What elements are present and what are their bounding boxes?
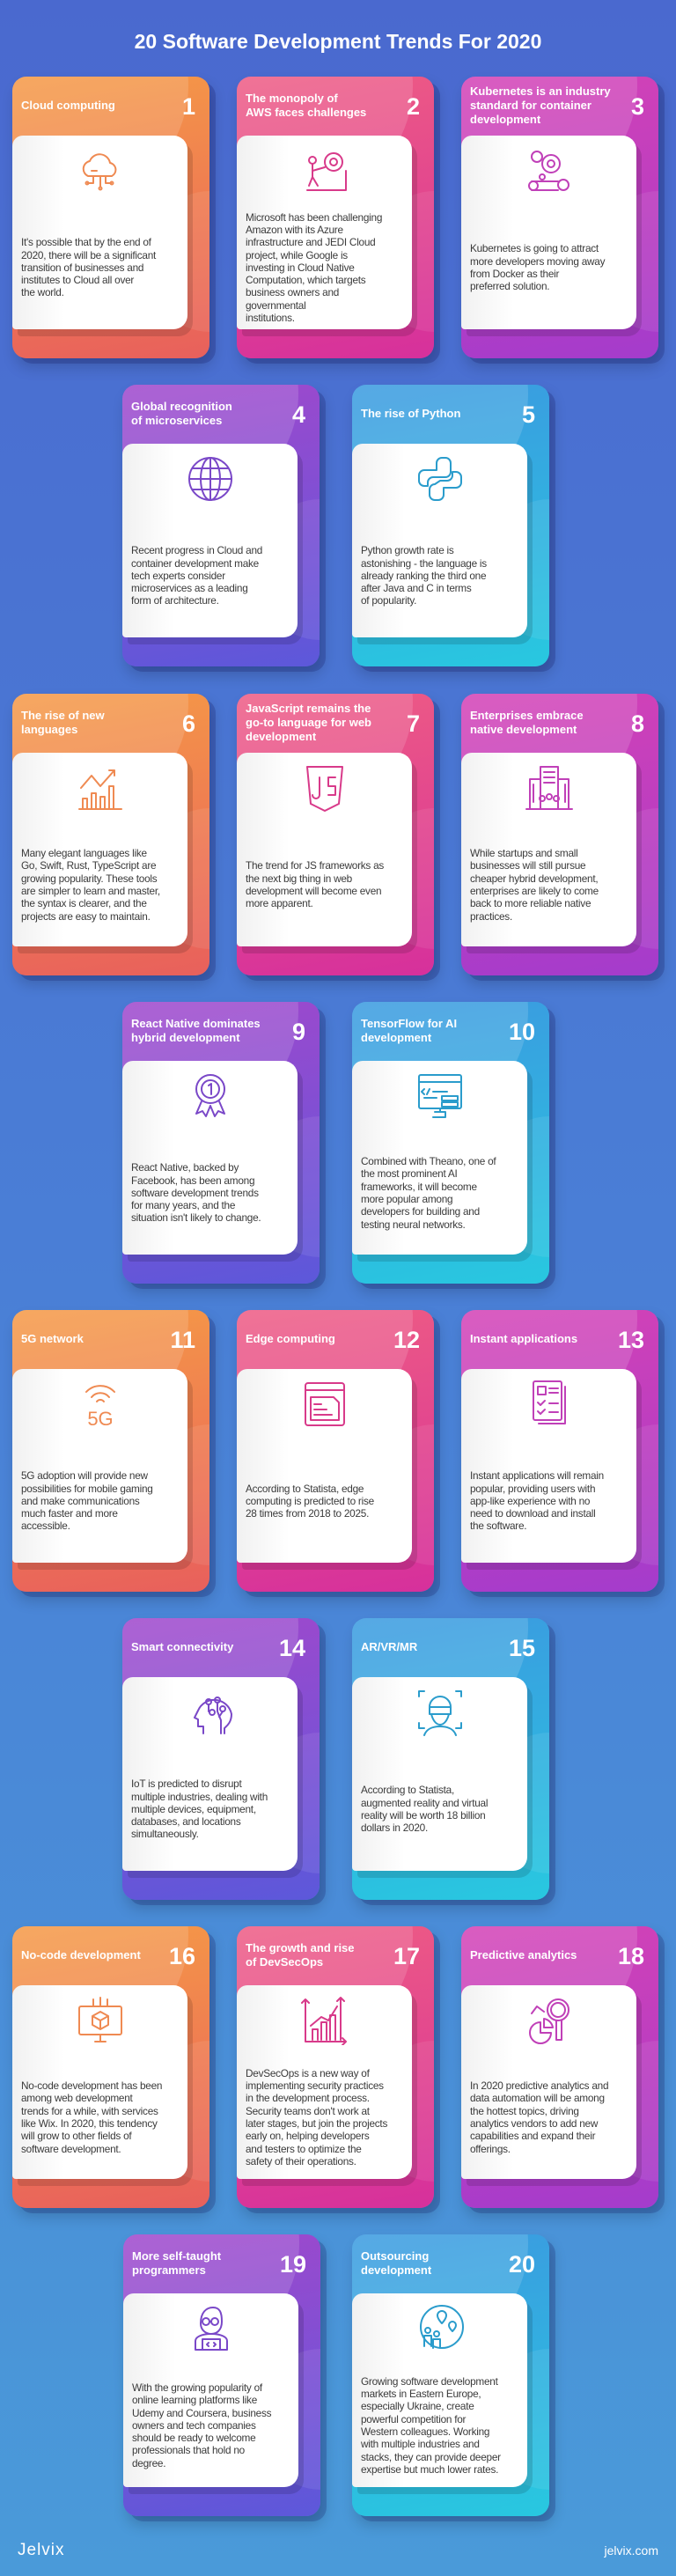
card 18 text: data automation will be among: [470, 2092, 605, 2104]
card 14 white panel: [122, 1677, 298, 1871]
icon: JS shield: [306, 766, 343, 812]
card 1 text: institutes to Cloud all over: [21, 274, 134, 286]
card 11 text: [21, 1469, 153, 1532]
card 11 heading: 5G network: [21, 1332, 84, 1345]
card 3 heading: development: [470, 113, 540, 126]
card 13 text: the software.: [470, 1520, 526, 1532]
card 10 text: Combined with Theano, one of: [361, 1155, 496, 1167]
card 19 text: [132, 2364, 299, 2487]
card 20 text: Western colleagues. Working: [361, 2425, 489, 2438]
card 8 white panel: [461, 753, 636, 946]
card 6 text: the syntax is clearer, and the: [21, 897, 147, 909]
card 8 text: While startups and small: [470, 847, 578, 859]
card 17 heading: of DevSecOps: [246, 1955, 323, 1969]
card 8 text: enterprises are likely to come: [470, 885, 599, 897]
card 12 text: According to Statista, edge: [246, 1483, 364, 1495]
icon: award badge: [195, 1074, 225, 1117]
card 13 text: app-like experience with no: [470, 1495, 590, 1507]
card 7 number: 7: [407, 710, 420, 737]
title: 20 Software Development Trends For 2020: [135, 30, 541, 53]
card 18 white panel: [461, 1985, 636, 2179]
card 4 number: 4: [292, 401, 305, 428]
card 3 text: from Docker as their: [470, 268, 559, 280]
icon: cloud: [83, 153, 116, 190]
card 7 text: The trend for JS frameworks as: [246, 859, 384, 872]
card 3 number: 3: [631, 93, 644, 120]
card 8 heading: [470, 709, 584, 736]
card 1 text: [21, 236, 157, 298]
card 13: instant apps: [461, 1310, 658, 1592]
card 8 number: 8: [631, 710, 644, 737]
icon: VR headset person: [418, 1690, 462, 1736]
card 7 text: more apparent.: [246, 897, 313, 909]
card 1: cloud computing: [12, 77, 209, 358]
footer logo: Jelvix: [18, 2541, 65, 2559]
icon: python logo: [418, 457, 462, 501]
card 11: 5G: [12, 1310, 209, 1592]
card 14 text: multiple devices, equipment,: [131, 1803, 256, 1815]
card 2 text: business owners and: [246, 286, 339, 298]
card 10 text: frameworks, it will become: [361, 1181, 477, 1193]
card 20 text: with multiple industries and: [361, 2438, 480, 2450]
card 3 white panel: [461, 136, 636, 329]
card 12 white panel: [237, 1369, 412, 1563]
card 16: no-code: [12, 1926, 209, 2208]
card 19 text: Udemy and Coursera, business: [132, 2407, 271, 2419]
card 2: AWS: [237, 77, 434, 358]
card 7 white panel: [237, 753, 412, 946]
card 6 number: 6: [182, 710, 195, 737]
card 20 heading: development: [361, 2263, 431, 2277]
card 14 text: databases, and locations: [131, 1815, 241, 1828]
card 7 heading: development: [246, 730, 316, 743]
card 6 heading: The rise of new: [21, 709, 105, 722]
card 1 white panel: [12, 136, 187, 329]
card 11 text: much faster and more: [21, 1507, 118, 1520]
card 2 number: 2: [407, 93, 420, 120]
card 7 heading: JavaScript remains the: [246, 702, 371, 715]
card 9 heading: [131, 1017, 261, 1044]
card 9 text: [131, 1161, 261, 1224]
card 10 white panel: [352, 1061, 527, 1255]
icon: magnifier pie chart: [525, 1996, 574, 2045]
card 19 text: owners and tech companies: [132, 2419, 256, 2432]
card 3 text: [470, 242, 606, 292]
card 9 text: software development trends: [131, 1187, 259, 1199]
card 4 text: form of architecture.: [131, 594, 219, 607]
card 5 text: already ranking the third one: [361, 570, 486, 582]
card 19: self-taught programmers: [123, 2234, 320, 2516]
card 3 text: Kubernetes is going to attract: [470, 242, 599, 254]
icon: bar chart arrows: [300, 1996, 349, 2045]
card 5 text: [361, 544, 487, 607]
card 2 text: investing in Cloud Native: [246, 261, 355, 274]
card 5 text: Python growth rate is: [361, 544, 454, 556]
card 19 heading: [132, 2243, 273, 2284]
card 15 text: [361, 1784, 488, 1834]
card 13 text: Instant applications will remain: [470, 1469, 604, 1482]
card 17 number: 17: [393, 1943, 420, 1969]
card 1 text: the world.: [21, 286, 64, 298]
card 17 text: early on, helping developers: [246, 2130, 370, 2142]
card 19 text: degree.: [132, 2457, 165, 2469]
card 11 text: possibilities for mobile gaming: [21, 1483, 153, 1495]
card 14 text: IoT is predicted to disrupt: [131, 1777, 241, 1790]
card 12 number: 12: [393, 1327, 420, 1353]
card 8 text: [470, 847, 599, 923]
card 11 text: and make communications: [21, 1495, 140, 1507]
card 16 text: software development.: [21, 2143, 121, 2155]
card 12: edge computing: [237, 1310, 434, 1592]
card 15 text: According to Statista,: [361, 1784, 454, 1796]
card 20 text: expertise but much lower rates.: [361, 2463, 498, 2476]
card 18: predictive analytics: [461, 1926, 658, 2208]
card 20 heading: Outsourcing: [361, 2249, 429, 2263]
card 7 text: [246, 859, 384, 909]
card 9 text: for many years, and the: [131, 1199, 235, 1211]
card 7 heading: go-to language for web: [246, 716, 371, 729]
card 13 text: need to download and install: [470, 1507, 596, 1520]
card 20 white panel: [352, 2293, 527, 2487]
icon: person pushing gear: [306, 152, 347, 191]
card 2 heading: [246, 92, 366, 119]
card 10 text: testing neural networks.: [361, 1218, 466, 1231]
card 3 text: more developers moving away: [470, 255, 605, 268]
card 19 white panel: [123, 2293, 298, 2487]
card 10: TensorFlow: [352, 1002, 549, 1284]
card 6 text: are simpler to learn and master,: [21, 885, 160, 897]
card 5 number: 5: [522, 401, 535, 428]
card 6 heading: languages: [21, 723, 77, 736]
card 8 heading: native development: [470, 723, 577, 736]
card 18 text: analytics vendors to add new: [470, 2117, 598, 2130]
card 12 heading: Edge computing: [246, 1332, 335, 1345]
card 13 number: 13: [618, 1327, 644, 1353]
card 18 text: offerings.: [470, 2143, 511, 2155]
card 3 heading: [470, 85, 611, 126]
card 6 text: growing popularity. These tools: [21, 872, 157, 885]
card 15 text: augmented reality and virtual: [361, 1797, 488, 1809]
card 17: DevSecOps: [237, 1926, 434, 2208]
card 16 text: trends for a while, with services: [21, 2105, 158, 2117]
card 10 heading: [361, 1017, 457, 1044]
card 10 text: the most prominent AI: [361, 1167, 458, 1180]
card 16 heading: No-code development: [21, 1948, 141, 1961]
card 1 text: 2020, there will be a significant: [21, 249, 156, 261]
card 5 white panel: [352, 444, 527, 637]
card 2 text: Amazon with its Azure: [246, 224, 343, 236]
card 19 text: professionals that hold no: [132, 2444, 245, 2456]
card 6: new languages: [12, 694, 209, 975]
card 15 number: 15: [509, 1635, 535, 1661]
card 7 text: the next big thing in web: [246, 872, 352, 885]
card 9 white panel: [122, 1061, 298, 1255]
card 19 text: With the growing popularity of: [132, 2381, 262, 2394]
card 14 text: [131, 1777, 268, 1840]
card 8: enterprises: [461, 694, 658, 975]
card 6 text: Go, Swift, Rust, TypeScript are: [21, 859, 156, 872]
card 6 text: Many elegant languages like: [21, 847, 147, 859]
card 4 heading: Global recognition: [131, 400, 232, 413]
card 4 text: microservices as a leading: [131, 582, 248, 594]
card 2 text: governmental: [246, 299, 305, 312]
card 4 heading: of microservices: [131, 414, 222, 427]
card 18 number: 18: [618, 1943, 644, 1969]
card 12 text: 28 times from 2018 to 2025.: [246, 1507, 369, 1520]
card 11 number: 11: [170, 1327, 195, 1353]
card 9 text: situation isn't likely to change.: [131, 1211, 261, 1224]
card 8 heading: Enterprises embrace: [470, 709, 584, 722]
card 9 heading: React Native dominates: [131, 1017, 261, 1030]
card 12 text: computing is predicted to rise: [246, 1495, 374, 1507]
card 6 heading: [21, 709, 105, 736]
card 2 text: institutions.: [246, 312, 295, 324]
card 17 text: safety of their operations.: [246, 2155, 356, 2168]
card 2 text: [246, 211, 382, 324]
card 20: outsourcing: [352, 2234, 549, 2516]
card 17 text: implementing security practices: [246, 2079, 384, 2092]
card 17 text: [246, 2056, 413, 2179]
card 11 white panel: [12, 1369, 187, 1563]
card 5 heading: The rise of Python: [361, 407, 460, 420]
card 20 text: especially Ukraine, create: [361, 2400, 474, 2412]
card 15: AR/VR/MR: [352, 1618, 549, 1900]
card 4 text: Recent progress in Cloud and: [131, 544, 262, 556]
card 17 text: Security teams don't work at: [246, 2105, 370, 2117]
card 16 text: among web development: [21, 2092, 133, 2104]
card 18 heading: Predictive analytics: [470, 1948, 577, 1961]
icon: head with circuit: [194, 1696, 232, 1734]
card 14 number: 14: [279, 1635, 305, 1661]
card 20 heading: [361, 2243, 502, 2284]
card 16 number: 16: [169, 1943, 195, 1969]
card 3 heading: Kubernetes is an industry: [470, 85, 611, 98]
card 17 text: later stages, but join the projects: [246, 2117, 387, 2130]
card 18 text: [470, 2056, 637, 2179]
card 16 white panel: [12, 1985, 187, 2179]
card 10 heading: TensorFlow for AI: [361, 1017, 457, 1030]
card 7: JavaScript: [237, 694, 434, 975]
card 1 number: 1: [182, 93, 195, 120]
card 20 text: markets in Eastern Europe,: [361, 2388, 481, 2400]
card 7 heading: [246, 702, 371, 743]
card 1 text: transition of businesses and: [21, 261, 143, 274]
card 9 text: React Native, backed by: [131, 1161, 239, 1174]
card 19 heading: programmers: [132, 2263, 206, 2277]
card 16 text: [21, 2079, 162, 2155]
card 8 text: practices.: [470, 910, 512, 923]
card 20 number: 20: [509, 2251, 535, 2278]
card 13 text: popular, providing users with: [470, 1483, 595, 1495]
card 20 text: [361, 2364, 528, 2487]
icon: code monitor: [418, 1074, 462, 1118]
card 6 white panel: [12, 753, 187, 946]
card 14: smart connectivity: [122, 1618, 320, 1900]
card 13 heading: Instant applications: [470, 1332, 577, 1345]
card 20 text: stacks, they can provide deeper: [361, 2451, 501, 2463]
card 5: Python: [352, 385, 549, 666]
card 19 text: should be ready to welcome: [132, 2432, 255, 2444]
card 2 heading: The monopoly of: [246, 92, 338, 105]
card 2 heading: AWS faces challenges: [246, 106, 366, 119]
card 18 text: In 2020 predictive analytics and: [470, 2079, 608, 2092]
card 7 text: development will become even: [246, 885, 381, 897]
icon: browser document: [305, 1382, 345, 1426]
card 9 text: Facebook, has been among: [131, 1174, 254, 1187]
card 8 text: back to more reliable native: [470, 897, 591, 909]
card 19 number: 19: [280, 2251, 306, 2278]
card 4: microservices: [122, 385, 320, 666]
icon: monitor with cube: [78, 1997, 122, 2042]
icon: programmer: [187, 2304, 236, 2353]
card 3 text: preferred solution.: [470, 280, 549, 292]
card 20 text: Growing software development: [361, 2375, 498, 2388]
card 15 text: reality will be worth 18 billion: [361, 1809, 486, 1822]
card 10 text: [361, 1155, 496, 1231]
card 11 text: accessible.: [21, 1520, 70, 1532]
icon: 5G signal: [85, 1385, 115, 1429]
footer url: jelvix.com: [605, 2543, 658, 2558]
card 17 heading: [246, 1935, 386, 1976]
card 18 text: the hottest topics, driving: [470, 2105, 579, 2117]
card 8 text: businesses will still pursue: [470, 859, 585, 872]
card 4 heading: [131, 400, 232, 427]
card 17 text: DevSecOps is a new way of: [246, 2067, 370, 2079]
card 13 white panel: [461, 1369, 636, 1563]
card 2 white panel: [237, 136, 412, 329]
card 17 text: and testers to optimize the: [246, 2143, 362, 2155]
card 10 text: developers for building and: [361, 1205, 480, 1218]
card 2 text: infrastructure and JEDI Cloud: [246, 236, 375, 248]
card 17 heading: The growth and rise: [246, 1941, 355, 1954]
card 4 white panel: [122, 444, 298, 637]
card 3: Kubernetes: [461, 77, 658, 358]
card 11 text: 5G adoption will provide new: [21, 1469, 148, 1482]
card 15 heading: AR/VR/MR: [361, 1640, 417, 1653]
card 19 text: online learning platforms like: [132, 2394, 257, 2406]
card 12 text: [246, 1483, 374, 1520]
card 8 text: cheaper hybrid development,: [470, 872, 598, 885]
card 15 white panel: [352, 1677, 527, 1871]
card 9 heading: hybrid development: [131, 1031, 240, 1044]
card 10 number: 10: [509, 1019, 535, 1045]
card 1 heading: Cloud computing: [21, 99, 115, 112]
card 5 text: astonishing - the language is: [361, 557, 487, 570]
card 14 text: simultaneously.: [131, 1828, 199, 1840]
icon: growth chart: [78, 769, 122, 810]
card 2 text: Computation, which targets: [246, 274, 365, 286]
card 6 text: projects are easy to maintain.: [21, 910, 151, 923]
card 5 text: after Java and C in terms: [361, 582, 472, 594]
card 19 heading: More self-taught: [132, 2249, 221, 2263]
card 20 text: powerful competition for: [361, 2413, 466, 2425]
card 17 white panel: [237, 1985, 412, 2179]
card 9: React Native: [122, 1002, 320, 1284]
card 6 text: [21, 847, 160, 923]
card 14 heading: Smart connectivity: [131, 1640, 233, 1653]
card 4 text: container development make: [131, 557, 259, 570]
card 1 text: It's possible that by the end of: [21, 236, 151, 248]
icon: globe with people: [415, 2304, 465, 2353]
icon: office building: [525, 766, 573, 810]
card 13 text: [470, 1469, 604, 1532]
card 3 heading: standard for container: [470, 99, 592, 112]
icon: gears: [528, 151, 569, 191]
card 2 text: Microsoft has been challenging: [246, 211, 382, 224]
card 4 text: [131, 544, 262, 607]
card 5 text: of popularity.: [361, 594, 416, 607]
card 16 text: like Wix. In 2020, this tendency: [21, 2117, 158, 2130]
card 10 heading: development: [361, 1031, 431, 1044]
card 16 text: will grow to other fields of: [21, 2130, 131, 2142]
card 2 text: project, while Google is: [246, 249, 348, 261]
icon: globe: [188, 457, 232, 501]
card 15 text: dollars in 2020.: [361, 1822, 428, 1834]
card 17 text: in the development process.: [246, 2092, 370, 2104]
icon: checklist pages: [533, 1380, 566, 1424]
card 9 number: 9: [292, 1019, 305, 1045]
card 10 text: more popular among: [361, 1193, 452, 1205]
card 18 text: capabilities and expand their: [470, 2130, 595, 2142]
card 4 text: tech experts consider: [131, 570, 225, 582]
card 16 text: No-code development has been: [21, 2079, 162, 2092]
card 14 text: multiple industries, dealing with: [131, 1791, 268, 1803]
